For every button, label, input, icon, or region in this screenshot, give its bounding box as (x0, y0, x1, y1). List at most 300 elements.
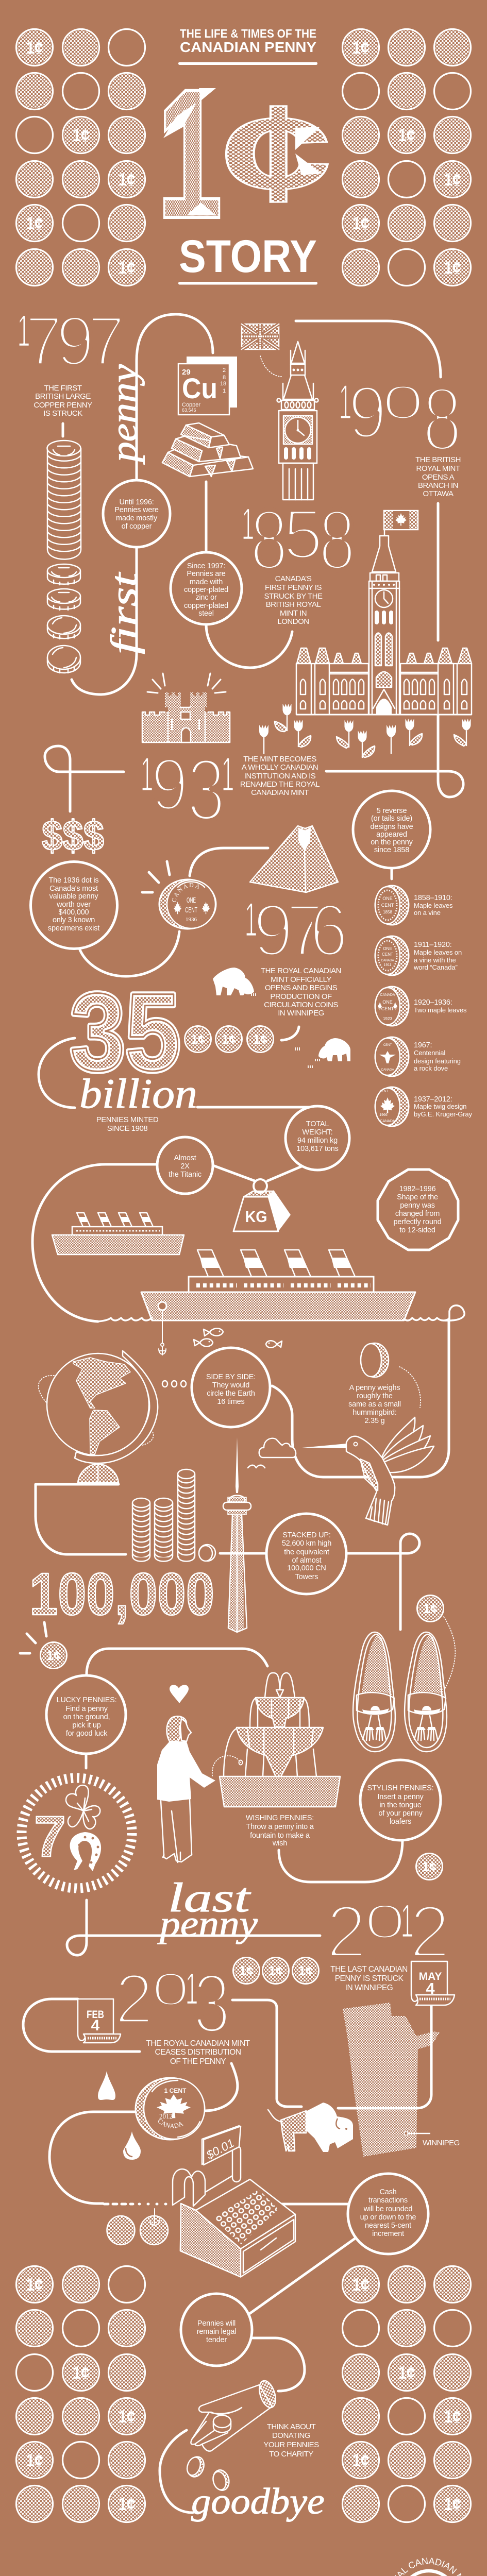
coin grid: bottom right: 1¢ (352, 2275, 370, 2295)
bubble: stacked up: 100,000 CN (287, 1564, 326, 1572)
coin grid: top right: 1¢ (444, 258, 461, 278)
small arc (281, 1027, 299, 1040)
caption: ottawa branch: OTTAWA (423, 489, 454, 498)
coin grid: top left (16, 29, 145, 285)
polygon: 12-sided penny: 1982–1996 (399, 1185, 436, 1193)
caption: winnipeg mint opens: MINT OFFICIALLY (271, 975, 331, 984)
icon: heart (170, 1685, 189, 1703)
reverse coin: 1911-1920: 1911 (383, 963, 392, 967)
year: 2012: 2 (326, 1890, 366, 1974)
icon: copper element tile: Copper (182, 402, 200, 408)
icon: copper element tile: 8 (223, 375, 226, 381)
bubble: total weight: 103,617 tons (296, 1145, 339, 1153)
year: 1797: 7 (88, 302, 125, 381)
reverse coin: 1937-2012: CENT (380, 1090, 388, 1093)
bubble: stylish pennies (360, 1760, 441, 1840)
script word: penny (rotated): penny (103, 364, 145, 465)
caption: winnipeg mint opens (261, 967, 341, 1018)
icon: fountain (220, 1673, 340, 1807)
icon: copper element tile: 1 (223, 388, 226, 394)
year: 1976: 7 (286, 889, 326, 972)
caption: pennies minted: PENNIES MINTED (96, 1115, 159, 1124)
coins row (233, 1958, 318, 1984)
coins row: 1¢ (298, 1964, 313, 1978)
bubble: pennies legal tender: Pennies will (197, 2319, 236, 2328)
reverse text: 1967: design featuring (414, 1057, 461, 1065)
caption: hummingbird weight: roughly the (357, 1392, 393, 1400)
reverse text: 1967 (414, 1041, 461, 1072)
title numeral: 1 cent: 1 (157, 50, 223, 257)
bubble: lucky pennies: on the ground, (63, 1713, 110, 1721)
reverse text: 1858-1910: Maple leaves (414, 902, 453, 909)
bubble: since 1997: Since 1997: (187, 562, 225, 570)
caption: canada's first penny: BRITISH ROYAL (266, 600, 321, 609)
reverse coin: 1967 (375, 1037, 409, 1076)
calendar: feb 4: 4 (91, 2017, 100, 2034)
timeline line: 1908 (296, 321, 441, 377)
timeline line: stylish to wishing (279, 1840, 402, 1882)
timeline line: manitoba (232, 2000, 431, 2108)
timeline line: feb 4 (23, 1999, 140, 2052)
reverse coin: 1911-1920: CENT (382, 952, 393, 957)
bubble: stylish pennies: Insert a penny (377, 1793, 424, 1801)
icon: bison left (295, 1038, 350, 1068)
title (178, 27, 317, 65)
bubble: stacked up: of almost (292, 1556, 322, 1565)
caption: donate to charity: THINK ABOUT (267, 2422, 316, 2431)
icon: big ben (277, 342, 318, 500)
icon: small ship (52, 1213, 184, 1255)
polygon: 12-sided penny: changed from (395, 1210, 440, 1218)
bubble: until 1996: of copper (122, 522, 152, 531)
coin grid: top right: 1¢ (444, 170, 461, 190)
caption: distribution ceases: THE ROYAL CANADIAN MINT (146, 2039, 250, 2048)
bubble: stylish pennies: STYLISH PENNIES: (367, 1784, 433, 1792)
coin grid: top right: 1¢ (352, 214, 370, 233)
bubble: until 1996: made mostly (116, 514, 158, 522)
bubble: since 1997: Pennies are (187, 570, 226, 578)
coin grid: bottom left: 1¢ (26, 2451, 43, 2470)
year: 1908: 1 (339, 374, 352, 429)
reverse text: 1911-1920 (413, 941, 462, 971)
caption: canada's first penny: STRUCK BY THE (264, 592, 323, 601)
reverse text: 1920-1936 (414, 998, 467, 1014)
caption: ottawa branch: THE BRITISH (415, 455, 461, 464)
bubble: side by side: SIDE BY SIDE: (206, 1373, 256, 1381)
coin grid: bottom left: 1¢ (72, 2363, 90, 2383)
bubble: stylish pennies: in the tongue (379, 1801, 422, 1809)
caption: ottawa branch (415, 455, 461, 498)
caption: wishing pennies: wish (272, 1839, 287, 1848)
bubble: until 1996: Until 1996: (119, 498, 154, 506)
reverse text: 1937-2012 (414, 1095, 473, 1118)
bubble: cash transactions (348, 2174, 428, 2254)
bubble: 1936 dot: valuable penny (49, 892, 98, 901)
reverse text: 1937-2012: byG.E. Kruger-Gray (414, 1110, 473, 1118)
reverse coin: 1937-2012: 1966 (379, 1113, 388, 1117)
bubble: 1936 dot: only 3 known (53, 916, 95, 924)
icon: big ship (141, 1250, 415, 1320)
caption: pennies minted (96, 1115, 159, 1133)
bubble: since 1997: copper-plated (184, 586, 228, 594)
bubble: total weight: 94 million kg (297, 1137, 338, 1145)
weight connector lines (213, 1165, 301, 1181)
icon: 2012 coin (135, 2077, 205, 2140)
caption: first british penny: IS STRUCK (43, 409, 82, 418)
bubble: total weight: WEIGHT: (302, 1128, 333, 1137)
reverse text: 1858-1910 (414, 894, 453, 917)
calendar: feb 4 (78, 1999, 121, 2043)
bubble: almost 2x the titanic: 2X (180, 1162, 190, 1171)
year: 1858: 5 (283, 495, 323, 574)
caption: hummingbird weight: hummingbird: (352, 1409, 397, 1417)
reverse coin: 1937-2012 (375, 1087, 409, 1126)
coin grid: bottom left: 1¢ (26, 2275, 43, 2295)
icon: hummingbird (302, 1417, 434, 1525)
coins row: 1¢ (239, 1964, 254, 1978)
caption: canada's first penny: LONDON (277, 617, 309, 626)
caption: distribution ceases (146, 2039, 250, 2066)
caption: donate to charity: TO CHARITY (269, 2450, 313, 2459)
caption: first british penny: BRITISH LARGE (35, 392, 91, 401)
coins beside 35: 1¢ (253, 1032, 267, 1047)
caption: last penny struck: PENNY IS STRUCK (335, 1974, 404, 1983)
year: 1858: 8 (318, 493, 356, 588)
bubble: since 1997: copper-plated (184, 602, 228, 610)
year: 2013: 0 (152, 1963, 190, 2015)
caption: hummingbird weight: same as a small (348, 1400, 401, 1409)
year: 1908: 0 (382, 376, 424, 429)
connector: cash to pennies bubbles (249, 2238, 356, 2314)
coin grid: top right (342, 29, 471, 285)
icon: canadian flag (380, 511, 418, 536)
reverse text: 1937-2012: Maple twig design (414, 1103, 466, 1110)
timeline line: first penny loop (72, 314, 213, 694)
caption: wholly canadian: INSTITUTION AND IS (244, 772, 316, 781)
lucky coin sparkle (20, 1622, 46, 1653)
icon: hand dropping pennies (191, 2379, 279, 2451)
calendar: feb 4: FEB (87, 2009, 104, 2021)
caption: first british penny: COPPER PENNY (33, 401, 92, 410)
icon: cloud (259, 1438, 296, 1458)
year: 2012: 2 (410, 1890, 450, 1973)
year: 2013: 3 (193, 1957, 230, 2050)
title numeral: 1 cent: ¢ (221, 77, 332, 229)
reverse text: 1920-1936: 1920–1936: (414, 998, 452, 1007)
icon: teardrops (98, 2071, 141, 2160)
bubble: 5 reverse designs: since 1858 (374, 846, 409, 854)
map marker: winnipeg: WINNIPEG (423, 2139, 460, 2147)
caption: last penny struck: IN WINNIPEG (345, 1984, 393, 1992)
icon: 1936 coin: 1936 (186, 917, 197, 923)
icon: 1936 coin: CANADA (172, 883, 199, 902)
caption: wholly canadian (240, 755, 320, 797)
bubble: almost 2x the titanic: Almost (174, 1154, 196, 1162)
bubble: almost 2x the titanic: the Titanic (169, 1171, 201, 1179)
icon: copper bars (162, 423, 253, 477)
timeline line: lucky to fountain (87, 1649, 267, 1674)
bubble: 5 reverse designs: 5 reverse (377, 807, 407, 815)
reverse text: 1967: a rock dove (414, 1064, 448, 1072)
caption: last penny struck (330, 1965, 408, 1992)
script words: last penny: penny (157, 1903, 258, 1944)
coin grid: top right: 1¢ (352, 38, 370, 58)
coin grid: bottom right: 1¢ (352, 2451, 370, 2470)
caption: canada's first penny: CANADA’S (275, 574, 312, 583)
caption: canada's first penny (264, 574, 323, 626)
reverse coin: 1858-1910: 1858 (383, 910, 392, 914)
bubble: lucky pennies (46, 1675, 126, 1768)
polygon: 12-sided penny: Shape of the (397, 1193, 438, 1201)
coin: top right over loafers: 1¢ (423, 1602, 438, 1616)
calendar: may 4 (411, 1961, 455, 2005)
icon: copper element tile (178, 357, 237, 415)
year: 2012 (326, 1890, 450, 1974)
icon: 2012 coin: 2012 (159, 2112, 173, 2120)
title: story: STORY (179, 230, 317, 282)
bubble: lucky pennies: pick it up (72, 1721, 101, 1730)
bubble: cash transactions: will be rounded (363, 2205, 412, 2213)
calendar: may 4: 4 (426, 1979, 435, 1997)
reverse coin: 1920-1936: CENT (381, 1006, 394, 1011)
icon: three penny stacks (132, 1469, 215, 1561)
bubble: side by side: 16 times (217, 1398, 245, 1406)
year: 1797 (17, 301, 125, 381)
year: 2013: 1 (185, 1963, 198, 2014)
icon: anchor (159, 1310, 166, 1355)
timeline line: coin to register (49, 2112, 136, 2204)
bubble: stacked up: 52,600 km high (282, 1539, 331, 1548)
year: 1976: 9 (253, 889, 293, 972)
bubble: side by side: They would (212, 1381, 249, 1389)
timeline line: 1931 left loop (45, 746, 124, 811)
three dots (162, 1381, 186, 1387)
timeline line: ottawa to 1931 (326, 503, 463, 797)
bubble: 1936 dot: specimens exist (48, 924, 99, 933)
year: 1931: 3 (187, 740, 225, 839)
bubble: until 1996: Pennies were (114, 506, 159, 514)
timeline line: around 35 billion (39, 1038, 317, 1108)
ocean waves (98, 1306, 464, 1321)
bubble: lucky pennies: for good luck (66, 1730, 108, 1738)
title: THE LIFE & TIMES OF THE (180, 27, 316, 40)
icons: tulips (259, 704, 471, 758)
bubble: since 1997: zinc or (195, 594, 217, 602)
icon: CN tower (223, 1437, 251, 1632)
caption: wishing pennies (246, 1814, 314, 1848)
reverse text: 1911-1920: a vine with the (414, 956, 456, 964)
polygon: 12-sided penny: to 12-sided (399, 1226, 435, 1234)
caption: first british penny (33, 384, 92, 418)
bubble: 5 reverse designs (353, 791, 430, 879)
caption: wholly canadian: CANADIAN MINT (251, 788, 309, 797)
script word: goodbye: goodbye (191, 2481, 325, 2522)
icon: 2012 coin: 1 CENT (164, 2087, 187, 2094)
bubble: lucky pennies: Find a penny (65, 1705, 108, 1713)
script word: first (rotated): first (103, 572, 145, 654)
caption: donate to charity (263, 2422, 319, 2459)
icon: wishing penny arc (212, 1756, 242, 1776)
icon: copper element tile: 2 (223, 367, 226, 374)
caption: ottawa branch: ROYAL MINT (416, 464, 460, 473)
reverse text: 1858-1910: on a vine (414, 909, 441, 917)
reverse text: 1967: 1967: (414, 1041, 432, 1049)
polygon: 12-sided penny: perfectly round (394, 1218, 442, 1226)
caption: canada's first penny: MINT IN (280, 609, 307, 618)
year: 1931: 1 (140, 747, 154, 801)
icon: copper element tile: Cu (182, 372, 217, 404)
bubble: stacked up: Towers (295, 1573, 318, 1581)
icon: dollar signs: $$$ (42, 812, 104, 859)
coins beside 35: 1¢ (191, 1032, 205, 1047)
year: 1976: 1 (244, 892, 258, 946)
polygon: 12-sided penny (378, 1170, 458, 1250)
caption: wishing pennies: WISHING PENNIES: (246, 1814, 314, 1822)
icon: seagull (248, 1465, 265, 1468)
bubble: 1936 dot: Canada's most (49, 885, 98, 893)
year: 1858: 1 (241, 499, 255, 549)
caption: donate to charity: DONATING (272, 2431, 310, 2440)
script words: last penny: last (168, 1875, 251, 1921)
bubble: pennies legal tender: remain legal (197, 2328, 236, 2336)
icon: penny edge coin (361, 1343, 389, 1377)
coin grid: bottom right: 1¢ (398, 2363, 415, 2383)
year: 1976: 6 (310, 889, 348, 972)
waves and right line (272, 1319, 449, 1477)
coin grid: top left: 1¢ (119, 258, 136, 278)
polygon: 12-sided penny: penny was (400, 1201, 435, 1210)
bubble: stacked up (266, 1514, 346, 1594)
bubble: 1936 dot: $400,000 (59, 908, 89, 917)
reverse coin: 1920-1936: CANADA (380, 993, 395, 997)
year: 1908: 8 (423, 368, 462, 470)
year: 1858 (241, 492, 356, 588)
caption: hummingbird weight (348, 1384, 401, 1425)
icon: penny loafers (353, 1632, 447, 1752)
timeline line: since 1997 (206, 482, 292, 668)
caption: wholly canadian: RENAMED THE ROYAL (240, 780, 320, 789)
connector: register to cash bubble (281, 2203, 348, 2205)
icon: manitoba map (343, 2003, 440, 2157)
caption: distribution ceases: CEASES DISTRIBUTION (155, 2048, 241, 2057)
title: CANADIAN PENNY (180, 39, 316, 55)
reverse coin: 1911-1920 (375, 936, 409, 975)
reverse text: 1920-1936: Two maple leaves (414, 1006, 467, 1014)
year: 2012: 0 (364, 1894, 406, 1948)
reverse coin: 1920-1936: ONE (382, 999, 393, 1005)
timeline line: titanic to ocean (32, 1164, 157, 1321)
coin grid: bottom left: 1¢ (119, 2495, 136, 2514)
timeline line: last penny (67, 1900, 320, 1955)
bubble: cash transactions: increment (372, 2230, 404, 2238)
caption: hummingbird weight: A penny weighs (349, 1384, 400, 1392)
caption: last penny struck: THE LAST CANADIAN (330, 1965, 408, 1974)
bubble: since 1997: made with (190, 578, 223, 586)
coin grid: top left: 1¢ (72, 126, 90, 145)
coins beside register (107, 2209, 168, 2245)
bubble: total weight (286, 1106, 349, 1170)
big number: 35: 35 (70, 971, 180, 1094)
icon: kg weight: KG (245, 1208, 267, 1226)
caption: first british penny: THE FIRST (44, 384, 82, 393)
coins beside 35: 1¢ (222, 1032, 236, 1047)
icons: falling pennies (185, 2454, 231, 2492)
caption: winnipeg mint opens: PRODUCTION OF (270, 992, 332, 1001)
bubble: 1936 dot: The 1936 dot is (49, 876, 98, 885)
caption: hummingbird weight: 2.35 g (364, 1417, 385, 1425)
reverse coin: 1920-1936 (375, 987, 409, 1026)
icon: falling pennies (47, 564, 80, 673)
caption: pennies minted: SINCE 1908 (107, 1124, 147, 1133)
reverse text: 1911-1920: Maple leaves on (414, 948, 462, 956)
timeline line: globe to stacks (36, 1484, 126, 1554)
script words: last penny (157, 1875, 258, 1944)
bubble: 1936 dot (31, 861, 117, 949)
icon: copper element tile: 18 (220, 381, 226, 387)
icon: 1936 coin (159, 879, 216, 929)
coin: under stylish (416, 1854, 442, 1879)
bubble: 1936 dot: worth over (56, 901, 91, 909)
reverse coin: 1858-1910: ONE (382, 896, 393, 901)
bubble: stacked up: the equivalent (284, 1548, 329, 1556)
reverse coin: 1967: CENT (383, 1044, 392, 1047)
reverse coin: 1858-1910 (375, 886, 409, 925)
coin grid: bottom left (16, 2266, 145, 2522)
timeline line: pennies bubble to hand (251, 2338, 305, 2391)
bubble: stylish pennies: loafers (390, 1818, 411, 1826)
icon: bison with map (268, 2103, 353, 2152)
icon: lucky sunburst: 7 (34, 1804, 66, 1869)
icon: stack of pennies (47, 440, 81, 560)
reverse text: 1911-1920: word “Canada” (413, 963, 458, 971)
bubble: stacked up: STACKED UP: (282, 1531, 331, 1539)
script word: billion: billion (79, 1070, 197, 1117)
icon: person wishing (157, 1716, 215, 1862)
caption: wholly canadian: THE MINT BECOMES (243, 755, 316, 764)
icon: 1936 coin: CENT (185, 906, 197, 914)
reverse text: 1858-1910: 1858–1910: (414, 894, 452, 902)
big number: 35: 35 (70, 971, 180, 1094)
coin grid: bottom left: 1¢ (119, 2407, 136, 2427)
bubble: since 1997: steel (198, 609, 214, 618)
reverse coin: 1920-1936: 1923 (383, 1016, 392, 1021)
caption: wishing pennies: fountain to make a (250, 1832, 310, 1840)
icon: lucky sunburst (22, 1778, 132, 1888)
coin grid: bottom right (342, 2266, 471, 2522)
icon: bison right (213, 968, 256, 996)
bubble: 5 reverse designs: designs have (370, 823, 413, 831)
coin grid: top right: 1¢ (398, 126, 415, 145)
caption: wishing pennies: Throw a penny into a (246, 1823, 314, 1831)
icon: winnipeg mint pyramid (250, 826, 338, 892)
coin grid: top left: 1¢ (119, 170, 136, 190)
icons: fish (194, 1328, 282, 1348)
reverse text: 1967: Centennial (414, 1049, 445, 1057)
icon: union jack flag (242, 324, 279, 349)
icon: copper element tile: 29 (182, 368, 191, 377)
coin: lucky (40, 1642, 67, 1668)
icon: cash register (173, 2126, 295, 2277)
bubble: pennies legal tender: tender (206, 2336, 227, 2344)
bubble: since 1997 (171, 552, 242, 624)
bubble: 5 reverse designs: on the penny (371, 838, 413, 846)
timeline line: through CN tower (220, 1534, 419, 1630)
bubble: total weight: TOTAL (306, 1120, 329, 1128)
year: 1931: 1 (221, 747, 234, 801)
caption: donate to charity: YOUR PENNIES (263, 2441, 319, 2449)
bubble: cash transactions: up or down to the (360, 2213, 416, 2222)
caption: winnipeg mint opens: OPENS AND BEGINS (265, 984, 338, 992)
